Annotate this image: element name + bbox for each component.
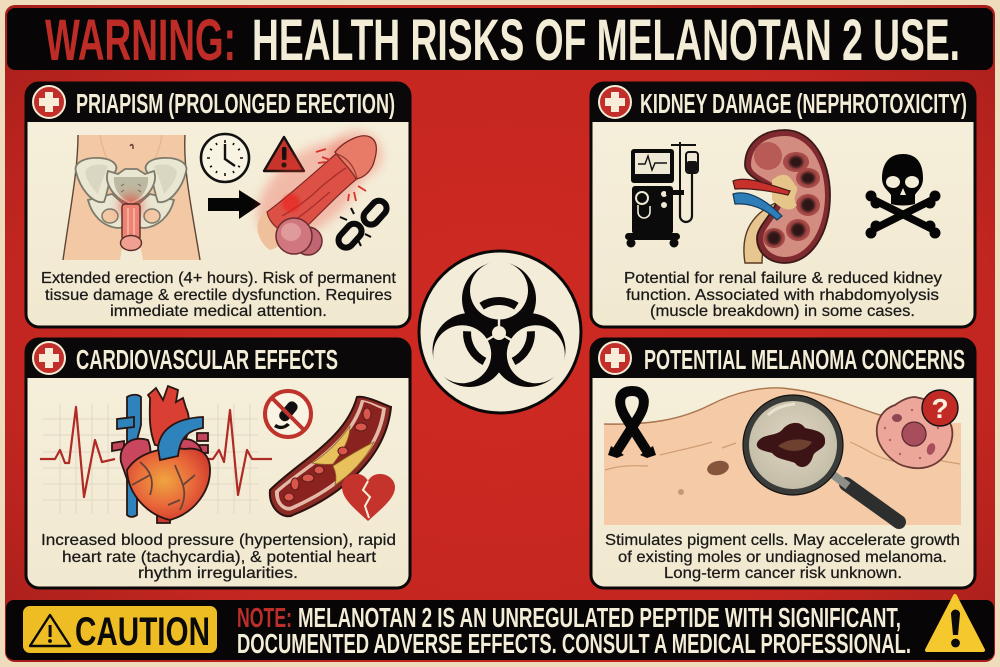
text: cardiovascular description: Increased blood pressure (hypertension), rapid xyxy=(41,532,396,549)
heading: cardiovascular effects: CARDIOVASCULAR EFFECTS xyxy=(76,344,338,375)
text: cardiovascular description xyxy=(41,532,396,582)
icon: medical cross xyxy=(599,342,631,374)
text: melanoma description: Long-term cancer risk unknown. xyxy=(664,565,902,582)
text: kidney description: (muscle breakdown) in some cases. xyxy=(650,303,915,320)
icon: medical cross xyxy=(33,342,65,374)
text: kidney description xyxy=(624,270,942,320)
text: cardiovascular description: rhythm irregularities. xyxy=(138,565,298,582)
heading: priapism: PRIAPISM (PROLONGED ERECTION) xyxy=(76,88,395,119)
illustration: clogged artery xyxy=(270,397,391,516)
illustration: kidney xyxy=(733,130,830,263)
illustration: dialysis machine xyxy=(625,142,698,248)
panel: kidney damage xyxy=(591,83,975,327)
text: priapism description: immediate medical attention. xyxy=(110,303,327,320)
icon: medical cross xyxy=(33,86,65,118)
illustration: skin cross-section xyxy=(604,388,961,525)
icon: broken chain xyxy=(335,198,390,251)
illustration: abnormal cell xyxy=(877,390,958,468)
footer note bar xyxy=(6,596,994,660)
illustration: swollen organ xyxy=(239,123,382,257)
illustration: magnifying glass over mole xyxy=(743,395,899,522)
title bar: WARNING: xyxy=(45,8,236,73)
icon: warning triangle xyxy=(927,596,983,650)
text: note xyxy=(237,602,911,659)
text: priapism description: tissue damage & erectile dysfunction. Requires xyxy=(45,287,392,304)
text: priapism description xyxy=(41,270,397,320)
caution badge: CAUTION xyxy=(75,610,210,654)
illustration: heart xyxy=(112,386,210,523)
panel: melanoma concerns xyxy=(591,339,975,588)
text: cardiovascular description: heart rate (tachycardia), & potential heart xyxy=(62,549,377,566)
text: melanoma description: Stimulates pigment cells. May accelerate growth xyxy=(605,532,960,549)
icon: biohazard emblem xyxy=(419,251,581,413)
icon: warning triangle xyxy=(264,137,304,171)
text: kidney description: Potential for renal failure & reduced kidney xyxy=(624,270,942,287)
illustration: pelvis anatomy xyxy=(63,135,200,260)
panel: priapism xyxy=(26,83,410,327)
text: melanoma description xyxy=(605,532,960,582)
icon: medical cross xyxy=(599,86,631,118)
text: kidney description: function. Associated with rhabdomyolysis xyxy=(626,287,939,304)
text: melanoma description: of existing moles or undiagnosed melanoma. xyxy=(618,549,947,566)
panel: cardiovascular effects xyxy=(26,339,410,588)
icon: clock xyxy=(201,134,249,182)
icon: broken heart xyxy=(342,474,395,521)
icon: awareness ribbon xyxy=(608,391,656,458)
chart: ECG trace xyxy=(40,404,272,514)
icon: no-drug sign xyxy=(265,391,311,437)
caution badge xyxy=(23,606,217,654)
illustration: abnormal cell: ? xyxy=(931,393,949,424)
text: priapism description: Extended erection (4+ hours). Risk of permanent xyxy=(41,270,397,287)
text: note: NOTE: xyxy=(237,602,292,633)
icon: skull and crossbones xyxy=(866,154,940,238)
arrow xyxy=(208,190,261,219)
